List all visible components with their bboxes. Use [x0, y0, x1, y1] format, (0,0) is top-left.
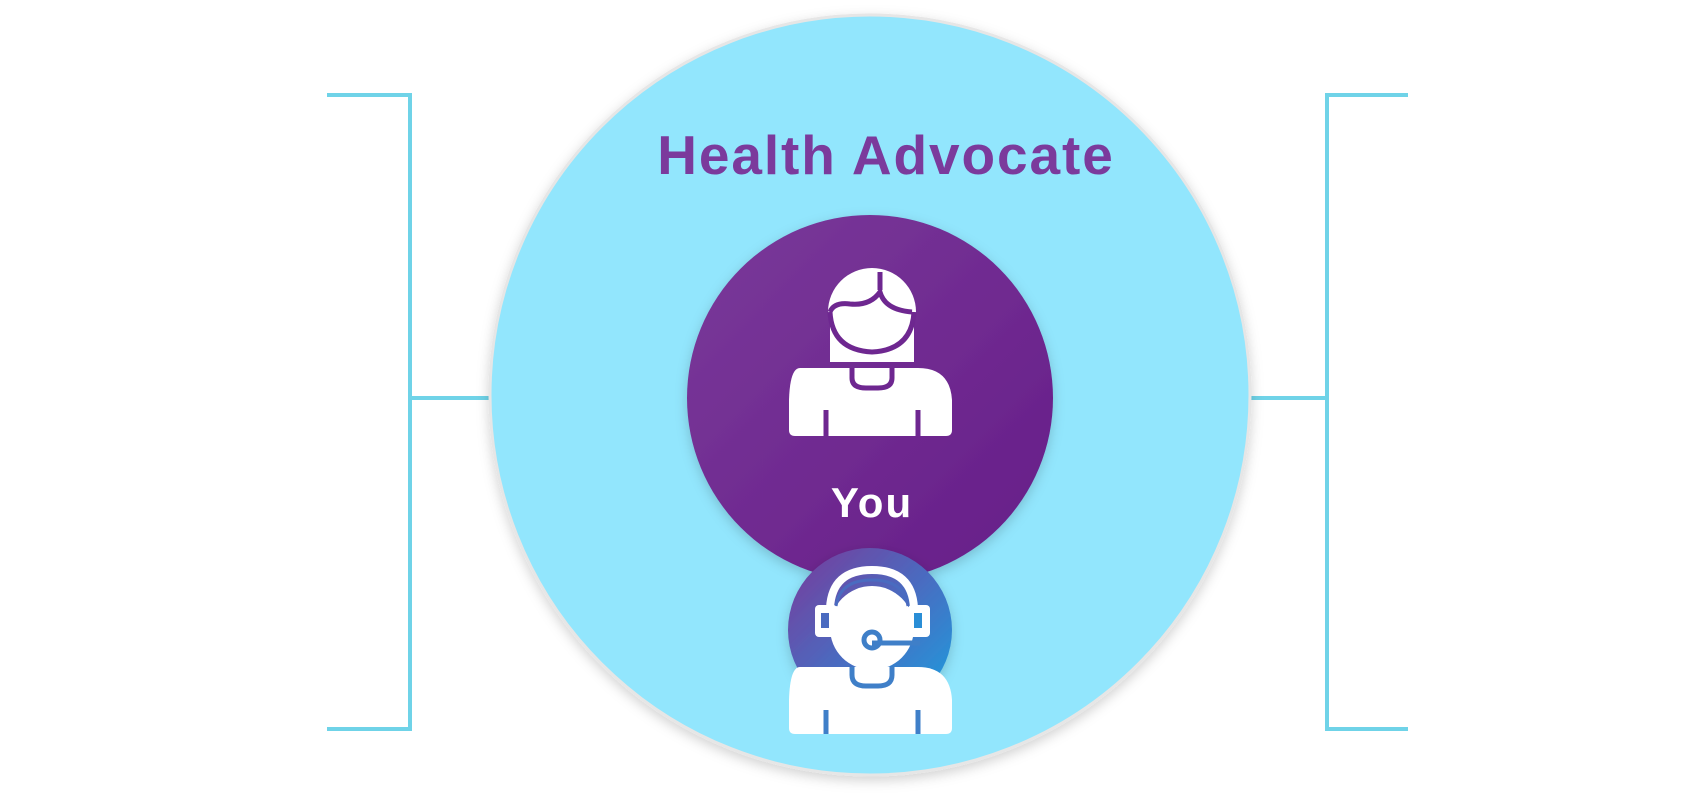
icon: headset person	[789, 570, 952, 734]
outer circle: Health Advocate	[490, 15, 1250, 775]
right bracket	[1245, 95, 1408, 729]
left bracket	[327, 95, 495, 729]
inner circle: You	[687, 215, 1053, 581]
title: Health Advocate	[657, 124, 1115, 186]
small circle: advocate	[788, 548, 952, 734]
icon: person	[789, 268, 952, 436]
label: You: You	[831, 479, 913, 526]
